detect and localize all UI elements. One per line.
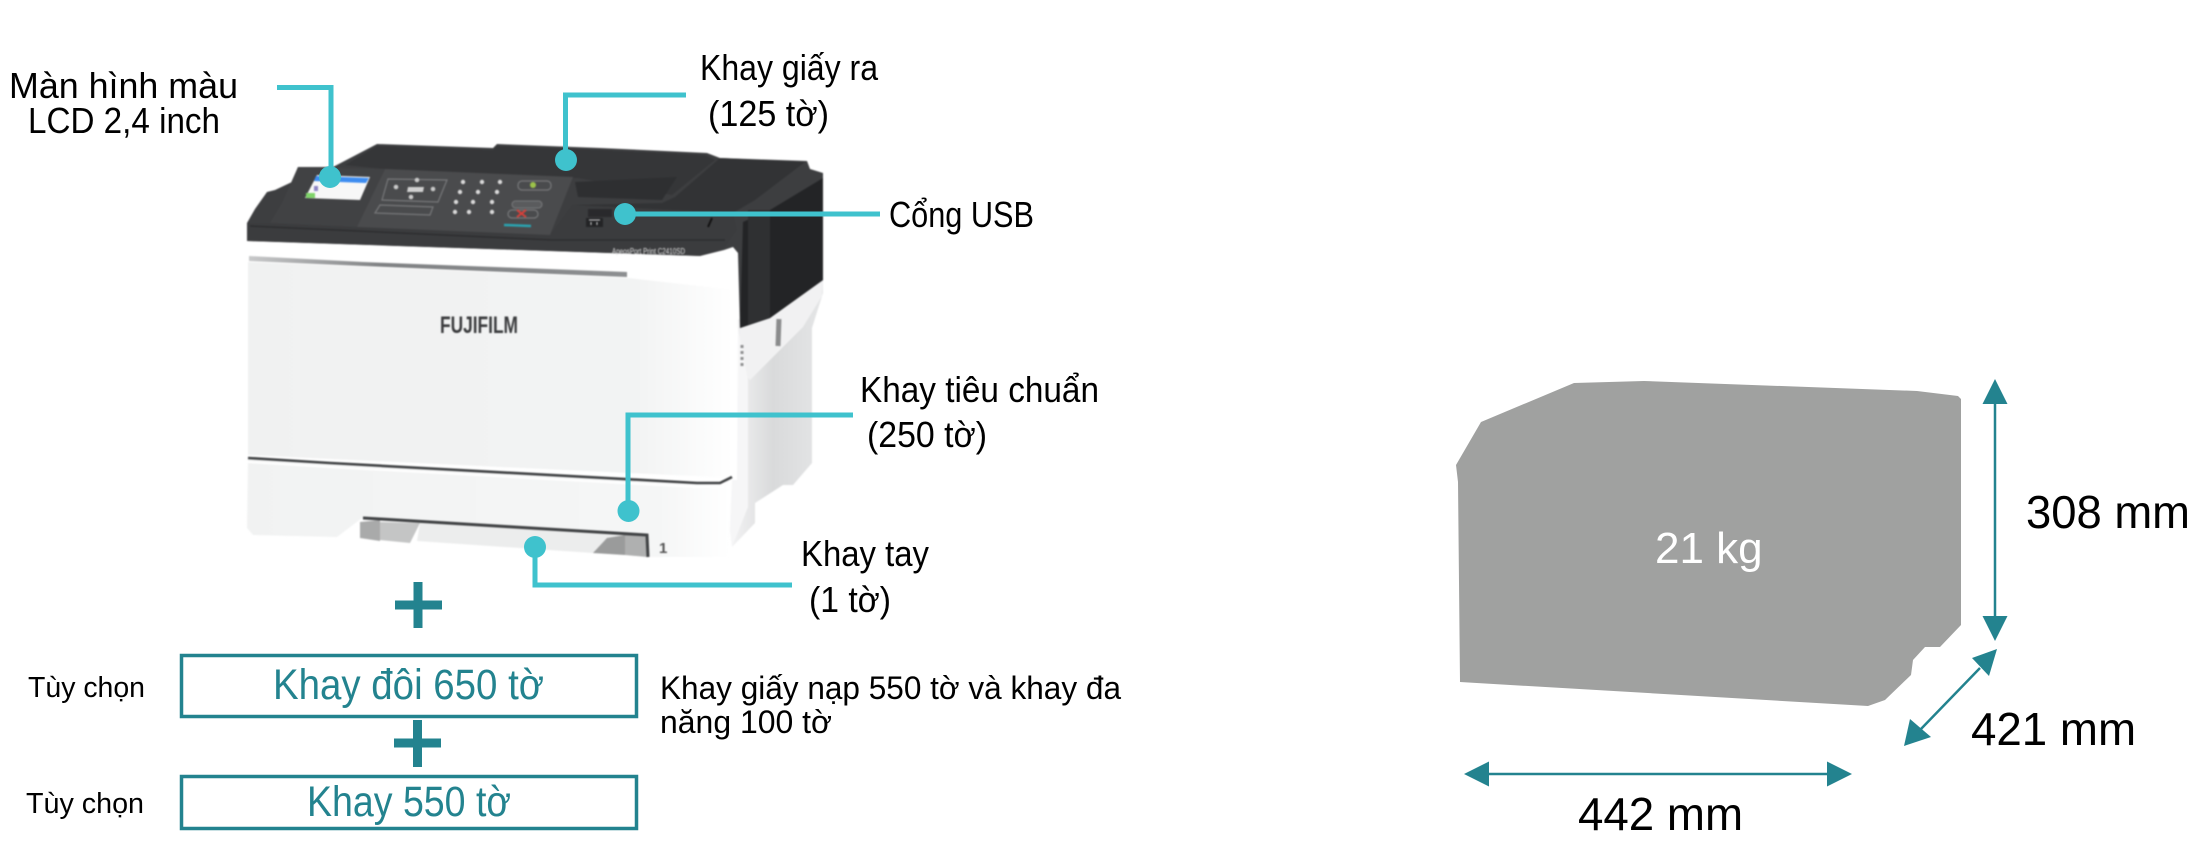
- label: LCD screen: LCD 2,4 inch: [28, 100, 220, 141]
- depth value: 421 mm: [1971, 703, 2136, 755]
- plus sign 1: [395, 582, 442, 628]
- option box: 650-sheet dual tray: Khay đôi 650 tờ: [273, 661, 544, 709]
- label: LCD screen: [9, 65, 238, 141]
- paper cassette: [247, 460, 732, 557]
- dual tray note: Khay giấy nạp 550 tờ và khay đa: [660, 670, 1121, 706]
- option label 1: Tùy chọn: [28, 672, 145, 704]
- dual tray note: năng 100 tờ: [660, 704, 832, 740]
- navigation pad: [382, 179, 447, 202]
- leader: standard tray: [618, 415, 853, 522]
- keypad keys: [453, 180, 502, 214]
- option label 2: Tùy chọn: [26, 788, 144, 820]
- model label: ApeosPort Print C2410SD: [612, 247, 685, 256]
- label: output tray: (125 tờ): [708, 93, 829, 134]
- paper slot bar: [249, 256, 627, 277]
- tray top shadow: [363, 518, 648, 557]
- printer silhouette with weight: 21 kg: [1655, 524, 1763, 573]
- plus sign 2: [394, 720, 441, 767]
- label: output tray: Khay giấy ra: [700, 47, 879, 88]
- label: manual tray: Khay tay: [801, 533, 929, 574]
- control panel left: [270, 167, 385, 227]
- manual feed tray: [360, 518, 648, 557]
- height arrow: [1982, 379, 2008, 641]
- corner white column: [726, 247, 748, 547]
- front white band: [247, 241, 738, 480]
- side white strip: [740, 280, 823, 380]
- label: manual tray: (1 tờ): [809, 579, 891, 620]
- output tray flap: [575, 177, 677, 200]
- flap shelf: [572, 158, 805, 213]
- navigation arrows: [394, 178, 435, 199]
- printer silhouette with weight: [1456, 381, 1961, 706]
- home buttons: [375, 205, 433, 215]
- option box: 650-sheet dual tray: [182, 656, 636, 716]
- black side block: [740, 178, 823, 328]
- width arrow: [1464, 762, 1852, 786]
- LCD screen: [305, 175, 370, 200]
- start pill with LED: [518, 181, 551, 190]
- printer dark housing: [247, 144, 823, 328]
- option box: 550-sheet tray: [182, 776, 636, 828]
- tray right guide inner: [593, 535, 625, 555]
- tray right guide outer: [625, 535, 647, 557]
- side slit: [708, 218, 712, 227]
- lip inner groove: [250, 226, 725, 240]
- printer front face: [248, 262, 735, 478]
- label: LCD screen: Màn hình màu: [9, 65, 238, 106]
- printer illustration: [247, 144, 823, 557]
- tray number: 1: [659, 540, 667, 557]
- tray bed: [417, 523, 625, 555]
- leader: output tray: [555, 95, 686, 171]
- label: USB port: Cổng USB: [889, 194, 1034, 235]
- option box: 550-sheet tray: Khay 550 tờ: [307, 778, 511, 826]
- printer side wall: [732, 280, 823, 547]
- tray left guide outer: [360, 520, 380, 541]
- label: standard tray: Khay tiêu chuẩn: [860, 369, 1099, 410]
- cassette seam: [248, 458, 732, 483]
- top surface: [345, 146, 715, 195]
- FUJIFILM logo: FUJIFILM: [440, 312, 518, 339]
- leader: LCD screen: [277, 88, 341, 188]
- label: standard tray: (250 tờ): [867, 414, 987, 455]
- leader: USB port: [614, 203, 880, 225]
- OK pill: [512, 201, 542, 208]
- front lip: [247, 205, 737, 256]
- teal bar: [504, 225, 531, 226]
- label: output tray: [700, 47, 879, 134]
- width value: 442 mm: [1578, 788, 1743, 840]
- seam highlight: [248, 462, 724, 487]
- leader: manual tray: [524, 536, 792, 585]
- height value: 308 mm: [2026, 486, 2190, 538]
- control panel keypad: [357, 169, 573, 235]
- USB port: [586, 209, 612, 227]
- stop pill: [508, 210, 538, 218]
- side latch: [776, 319, 781, 346]
- tray left guide inner: [380, 522, 420, 543]
- label: standard tray: [860, 369, 1099, 455]
- dual tray note: [660, 670, 1121, 740]
- depth arrow: [1904, 649, 1997, 746]
- label: manual tray: [801, 533, 929, 620]
- side vents: [740, 345, 744, 368]
